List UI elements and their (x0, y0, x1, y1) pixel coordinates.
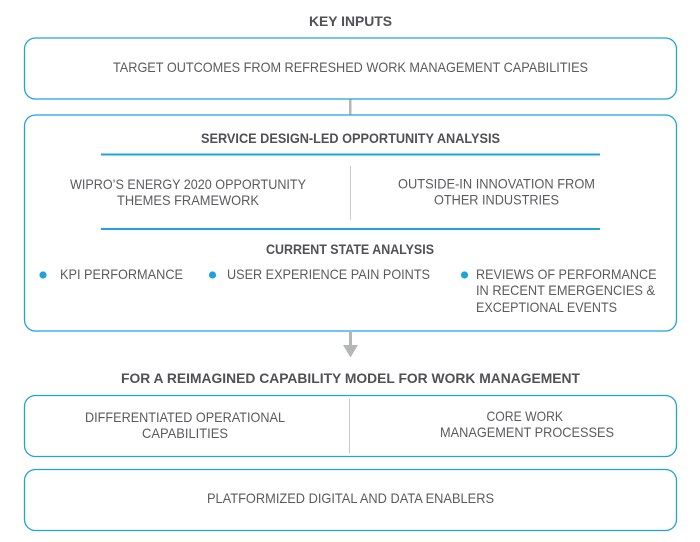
text: outside-in innovation: OUTSIDE-IN INNOVATION FROM (398, 176, 595, 192)
heading: current state analysis: CURRENT STATE ANALYSIS (266, 242, 434, 257)
bullet: KPI performance: KPI PERFORMANCE (60, 267, 183, 282)
panel: target outcomes (24, 38, 676, 99)
panel: platformized enablers (24, 470, 676, 530)
text: differentiated operational capabilities: DIFFERENTIATED OPERATIONAL (85, 410, 285, 425)
panel: target outcomes: TARGET OUTCOMES FROM REFRESHED WORK MANAGEMENT CAPABILITIES (113, 60, 588, 75)
bullet: reviews of performance: REVIEWS OF PERFORMANCE (476, 267, 656, 282)
panel: capabilities and processes (24, 396, 676, 456)
panel: service design-led opportunity analysis (24, 115, 676, 331)
bullet: reviews of performance (461, 267, 656, 315)
text: outside-in innovation (398, 176, 595, 208)
heading: service design-led opportunity analysis: SERVICE DESIGN-LED OPPORTUNITY ANALYSIS (201, 131, 500, 146)
bullet: reviews of performance: EXCEPTIONAL EVENTS (476, 300, 617, 315)
bullet: reviews of performance: IN RECENT EMERGENCIES & (476, 283, 655, 298)
arrow: down (343, 331, 358, 358)
text: core work management processes (440, 409, 614, 440)
panel: platformized enablers: PLATFORMIZED DIGITAL AND DATA ENABLERS (207, 491, 494, 506)
text: Wipro framework: WIPRO’S ENERGY 2020 OPPORTUNITY (70, 177, 306, 192)
bullet: user experience pain points: USER EXPERIENCE PAIN POINTS (227, 267, 430, 282)
text: outside-in innovation: OTHER INDUSTRIES (434, 192, 559, 208)
text: Wipro framework: THEMES FRAMEWORK (117, 193, 259, 208)
text: differentiated operational capabilities: CAPABILITIES (142, 426, 228, 441)
connector between top boxes (349, 99, 352, 115)
text: Wipro framework (70, 177, 306, 208)
text: core work management processes: MANAGEMENT PROCESSES (440, 425, 614, 440)
text: differentiated operational capabilities (85, 410, 285, 441)
text: core work management processes: CORE WORK (486, 409, 563, 424)
heading: key inputs: KEY INPUTS (309, 14, 392, 29)
heading: reimagined capability model: FOR A REIMAGINED CAPABILITY MODEL FOR WORK MANAGEMENT (121, 371, 581, 386)
